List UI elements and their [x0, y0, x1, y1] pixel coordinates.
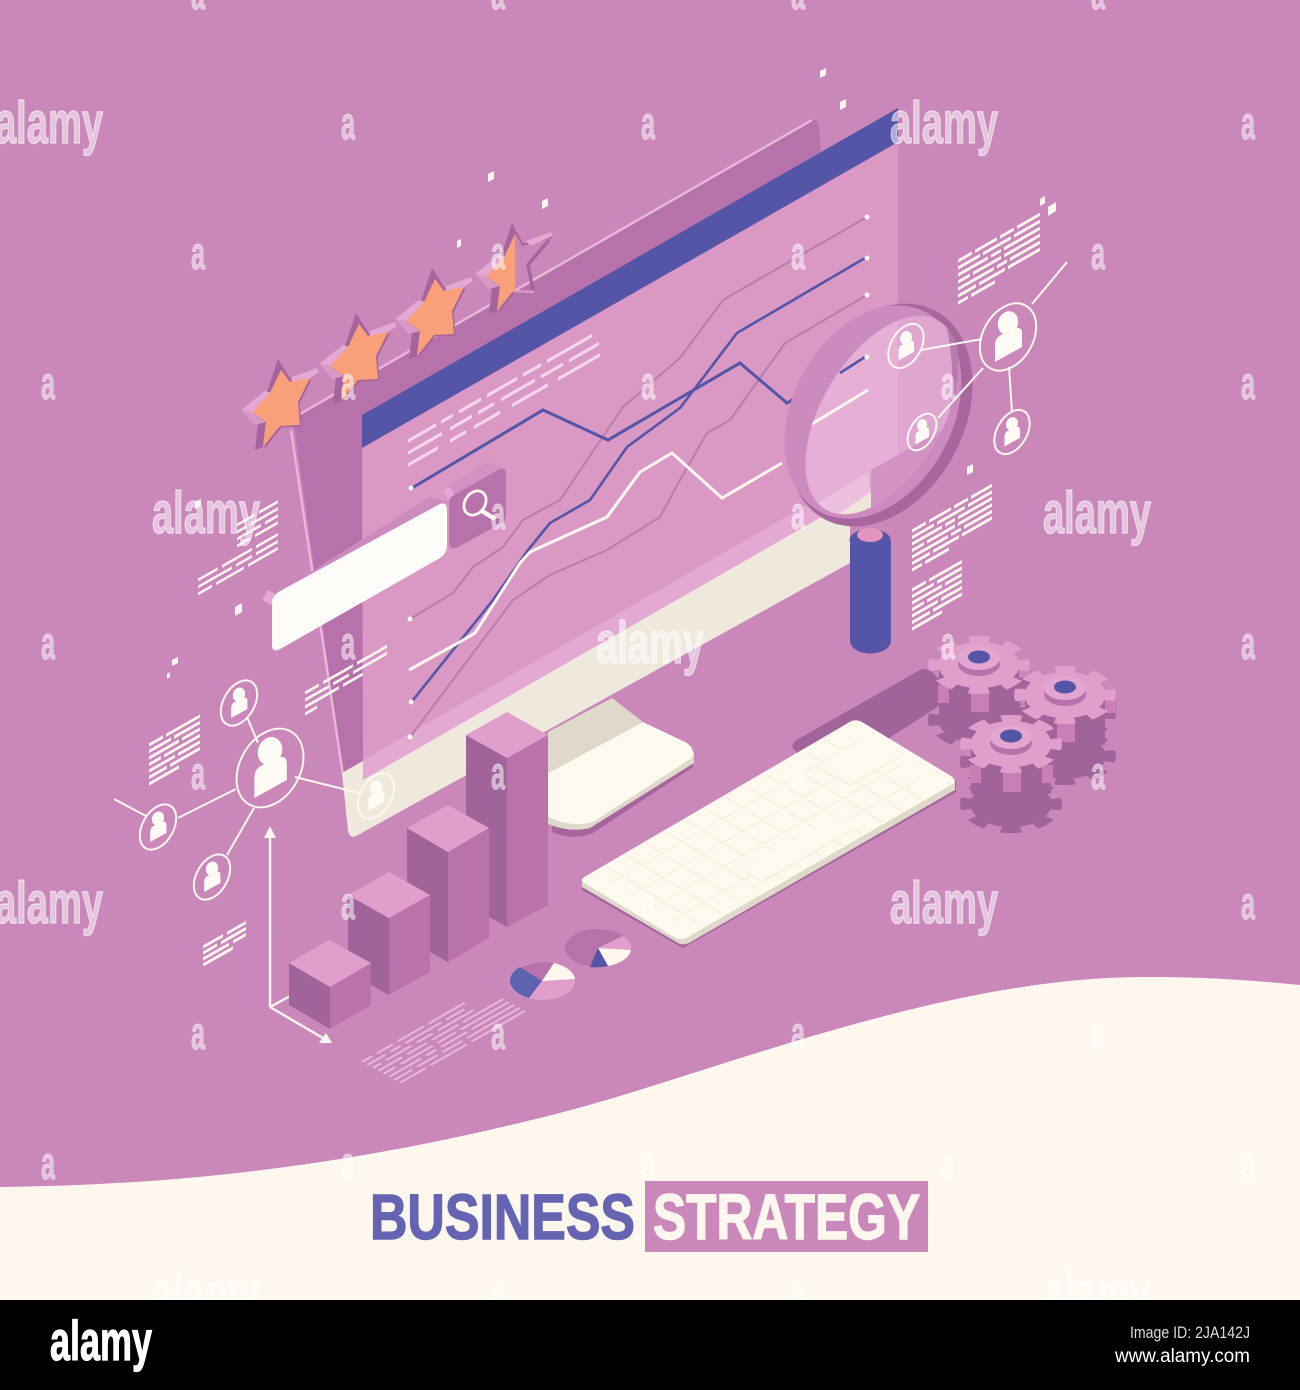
monitor window	[291, 108, 898, 837]
watermarks: a	[341, 357, 355, 409]
watermarks: a	[341, 97, 355, 149]
white line	[409, 453, 782, 670]
gear back left	[934, 639, 1024, 746]
watermarks: alamy	[0, 90, 103, 156]
watermarks: a	[191, 1007, 205, 1059]
bar 4	[466, 712, 548, 927]
watermarks: a	[1241, 1137, 1255, 1189]
watermarks: a	[641, 97, 655, 149]
search button top	[443, 462, 505, 500]
watermarks: a	[41, 617, 55, 669]
magnifier lens	[806, 316, 958, 514]
watermarks: alamy	[152, 480, 260, 546]
screen	[362, 108, 898, 760]
space bar	[743, 816, 856, 882]
decorative small squares	[167, 68, 1056, 679]
title	[370, 1181, 928, 1253]
watermarks: a	[941, 357, 955, 409]
axes arrows	[264, 826, 332, 1043]
watermarks: a	[1091, 227, 1105, 279]
blue line two	[413, 258, 865, 700]
chart lines	[408, 214, 870, 740]
watermarks: a	[791, 1007, 805, 1059]
stand base shadow	[552, 750, 693, 837]
search bar end cap	[262, 590, 277, 605]
text block: ground	[362, 990, 525, 1083]
footer logo: alamy	[50, 1309, 152, 1372]
magnifier handle	[850, 528, 891, 654]
icon: person	[898, 329, 914, 360]
star 3	[395, 268, 473, 359]
watermarks: alamy	[1043, 1260, 1151, 1326]
watermarks: a	[1241, 357, 1255, 409]
stand base edge	[548, 752, 694, 830]
icon: person large	[994, 308, 1022, 362]
magnifier	[784, 304, 972, 654]
text block: mid right	[912, 485, 992, 570]
icon: person	[368, 779, 384, 811]
keyboard top	[582, 720, 954, 939]
mauve line two	[410, 295, 867, 737]
watermarks: a	[491, 747, 505, 799]
screen band	[363, 453, 898, 780]
star 2	[319, 313, 397, 404]
watermarks: a	[1241, 877, 1255, 929]
bar 2	[348, 872, 430, 995]
watermarks: alamy	[152, 1260, 260, 1326]
text block: lower right	[912, 562, 962, 629]
text block: far left	[149, 716, 200, 784]
header bar	[362, 108, 898, 448]
gear back right	[1020, 669, 1117, 782]
text block: top right	[958, 214, 1040, 303]
watermarks: a	[791, 227, 805, 279]
footer bar	[0, 1300, 1300, 1390]
enter key edge	[817, 755, 903, 785]
watermarks: a	[1091, 1007, 1105, 1059]
watermarks: a	[341, 877, 355, 929]
pie chart one	[509, 962, 575, 1000]
search button	[449, 469, 506, 548]
blue line one	[412, 363, 797, 488]
star 4 half filled	[475, 223, 553, 314]
watermarks: a	[1241, 97, 1255, 149]
watermarks: a	[341, 1137, 355, 1189]
watermarks: a	[641, 357, 655, 409]
website: www.alamy.com	[1114, 1346, 1250, 1367]
bar 3	[407, 805, 489, 962]
text block: small left	[203, 922, 246, 965]
network left	[114, 674, 402, 906]
keyboard side	[582, 780, 955, 944]
keyboard shadow	[792, 669, 948, 770]
watermarks: a	[341, 617, 355, 669]
title word one: BUSINESS	[370, 1181, 635, 1253]
watermarks: alamy	[890, 870, 998, 936]
monitor bezel	[342, 480, 850, 837]
watermarks: a	[491, 1007, 505, 1059]
watermarks: a	[791, 1267, 805, 1319]
watermarks: a	[191, 747, 205, 799]
keys	[595, 730, 941, 932]
watermarks: alamy	[1043, 480, 1151, 546]
watermarks: a	[791, 747, 805, 799]
watermarks: a	[41, 357, 55, 409]
stars rating	[241, 223, 553, 450]
watermarks: a	[941, 617, 955, 669]
stand neck	[548, 698, 643, 773]
bar chart	[289, 712, 548, 1029]
watermarks: a	[41, 1137, 55, 1189]
monitor stand	[548, 698, 694, 837]
watermarks: a	[491, 227, 505, 279]
stand base	[548, 722, 693, 824]
watermarks: alamy	[890, 90, 998, 156]
magnifier light rim	[749, 275, 997, 549]
icon: magnifying search	[459, 487, 495, 519]
icon: person	[204, 860, 220, 892]
keyboard	[582, 720, 956, 948]
text block: lower window	[305, 646, 387, 714]
search bar	[262, 462, 506, 650]
text block: left	[198, 534, 278, 594]
watermarks: a	[941, 1137, 955, 1189]
title word two: STRATEGY	[653, 1181, 920, 1253]
icon: person	[1004, 415, 1020, 446]
search button end cap	[443, 487, 454, 502]
watermarks: a	[1241, 617, 1255, 669]
watermarks: alamy	[0, 870, 103, 936]
network right	[881, 262, 1067, 460]
star 1	[241, 359, 319, 450]
back panel edge lines	[291, 120, 812, 775]
gear front	[966, 718, 1056, 830]
watermarks: a	[191, 227, 205, 279]
mauve line one	[410, 217, 867, 619]
enter key	[817, 738, 903, 785]
watermarks: a	[491, 1267, 505, 1319]
magnifier dark rim	[750, 271, 1010, 559]
watermarks: a	[1091, 747, 1105, 799]
title highlight box	[645, 1181, 928, 1252]
keyboard shadow edge	[582, 780, 956, 948]
watermarks: a	[791, 487, 805, 539]
search bar rim	[272, 497, 447, 610]
search field	[272, 503, 447, 650]
image id: Image ID: 2JA142J	[1130, 1323, 1250, 1342]
icon: person	[231, 686, 247, 718]
space bar edge	[743, 828, 856, 882]
pie chart two	[565, 929, 631, 967]
watermarks: a	[641, 1137, 655, 1189]
icon: person large	[254, 734, 287, 798]
footer	[0, 1300, 1300, 1390]
text block: on screen	[408, 331, 600, 465]
gears	[934, 639, 1117, 830]
back panel	[293, 120, 822, 780]
bar 1	[289, 940, 371, 1029]
text block: upper left	[237, 502, 278, 546]
cream wave	[0, 977, 1300, 1300]
line end points	[408, 214, 870, 740]
watermarks: a	[641, 877, 655, 929]
watermarks: alamy	[596, 610, 704, 676]
icon: person	[150, 810, 166, 842]
watermarks: a	[491, 487, 505, 539]
icon: person	[915, 418, 929, 444]
